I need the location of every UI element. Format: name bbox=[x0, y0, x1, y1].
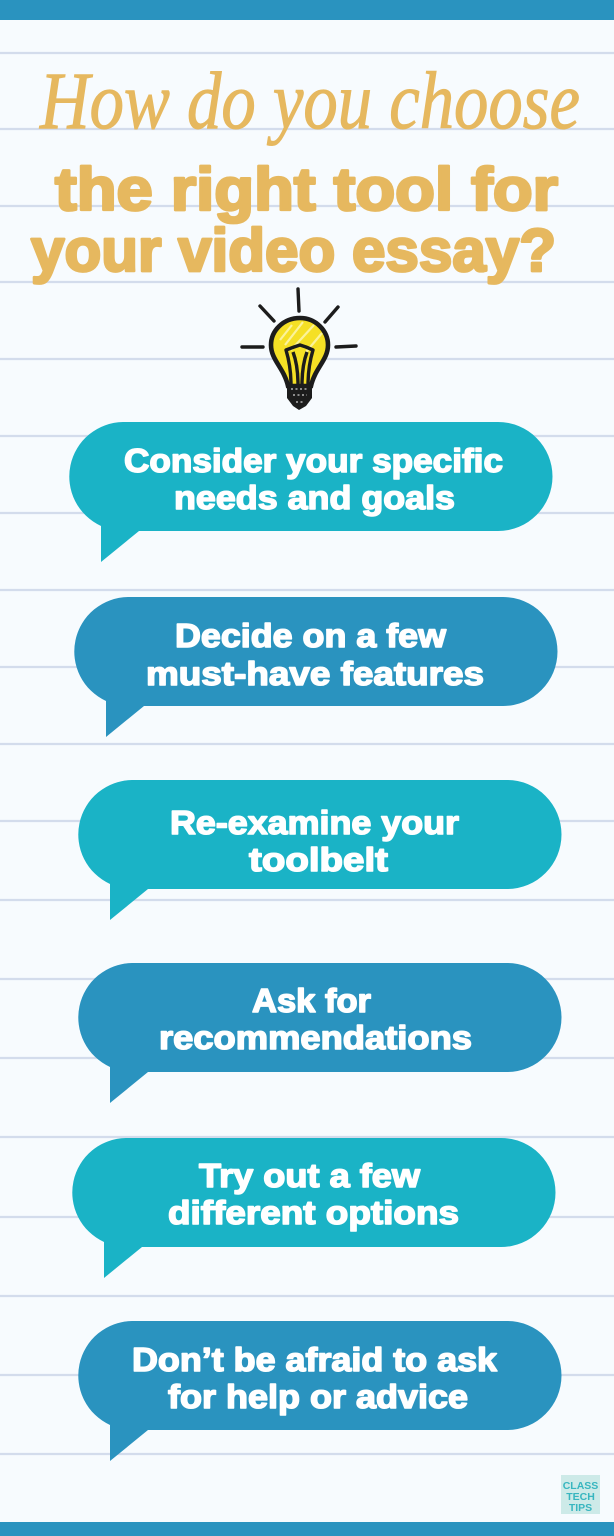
icon: light bulb bbox=[242, 289, 356, 410]
panel: bubble 2: Decide on a few bbox=[175, 617, 446, 654]
panel: bubble 5: Try out a few bbox=[199, 1157, 420, 1194]
panel: bubble 4 bbox=[78, 963, 561, 1103]
panel: bubble 6: Don’t be afraid to ask bbox=[132, 1341, 498, 1378]
logo: Class Tech Tips bbox=[561, 1475, 600, 1514]
panel: bubble 1 bbox=[69, 422, 552, 562]
logo: Class Tech Tips: CLASS bbox=[563, 1480, 598, 1492]
title bold line 2: your video essay? bbox=[31, 217, 556, 284]
title bbox=[31, 55, 580, 284]
panel: bubble 1: Consider your specific bbox=[124, 442, 503, 479]
panel: bubble 5 bbox=[72, 1138, 556, 1278]
panel: bubble 2: must-have features bbox=[146, 655, 484, 692]
panel: bubble 6 bbox=[78, 1321, 561, 1461]
bottom bar bbox=[0, 1522, 614, 1536]
logo: Class Tech Tips: TECH bbox=[566, 1491, 595, 1503]
top bar bbox=[0, 0, 614, 20]
panel: bubble 3: toolbelt bbox=[249, 841, 388, 878]
panel: bubble 1: needs and goals bbox=[174, 479, 455, 516]
panel: bubble 2 bbox=[74, 597, 557, 737]
panel: bubble 4: recommendations bbox=[159, 1019, 472, 1056]
panel: bubble 6: for help or advice bbox=[168, 1378, 468, 1415]
panel: bubble 5: different options bbox=[168, 1194, 459, 1231]
panel: bubble 3: Re-examine your bbox=[170, 804, 459, 841]
title bold line 1: the right tool for bbox=[55, 156, 558, 223]
logo: Class Tech Tips: TIPS bbox=[569, 1502, 592, 1514]
panel: bubble 4: Ask for bbox=[252, 982, 371, 1019]
panel: bubble 3 bbox=[78, 780, 561, 920]
